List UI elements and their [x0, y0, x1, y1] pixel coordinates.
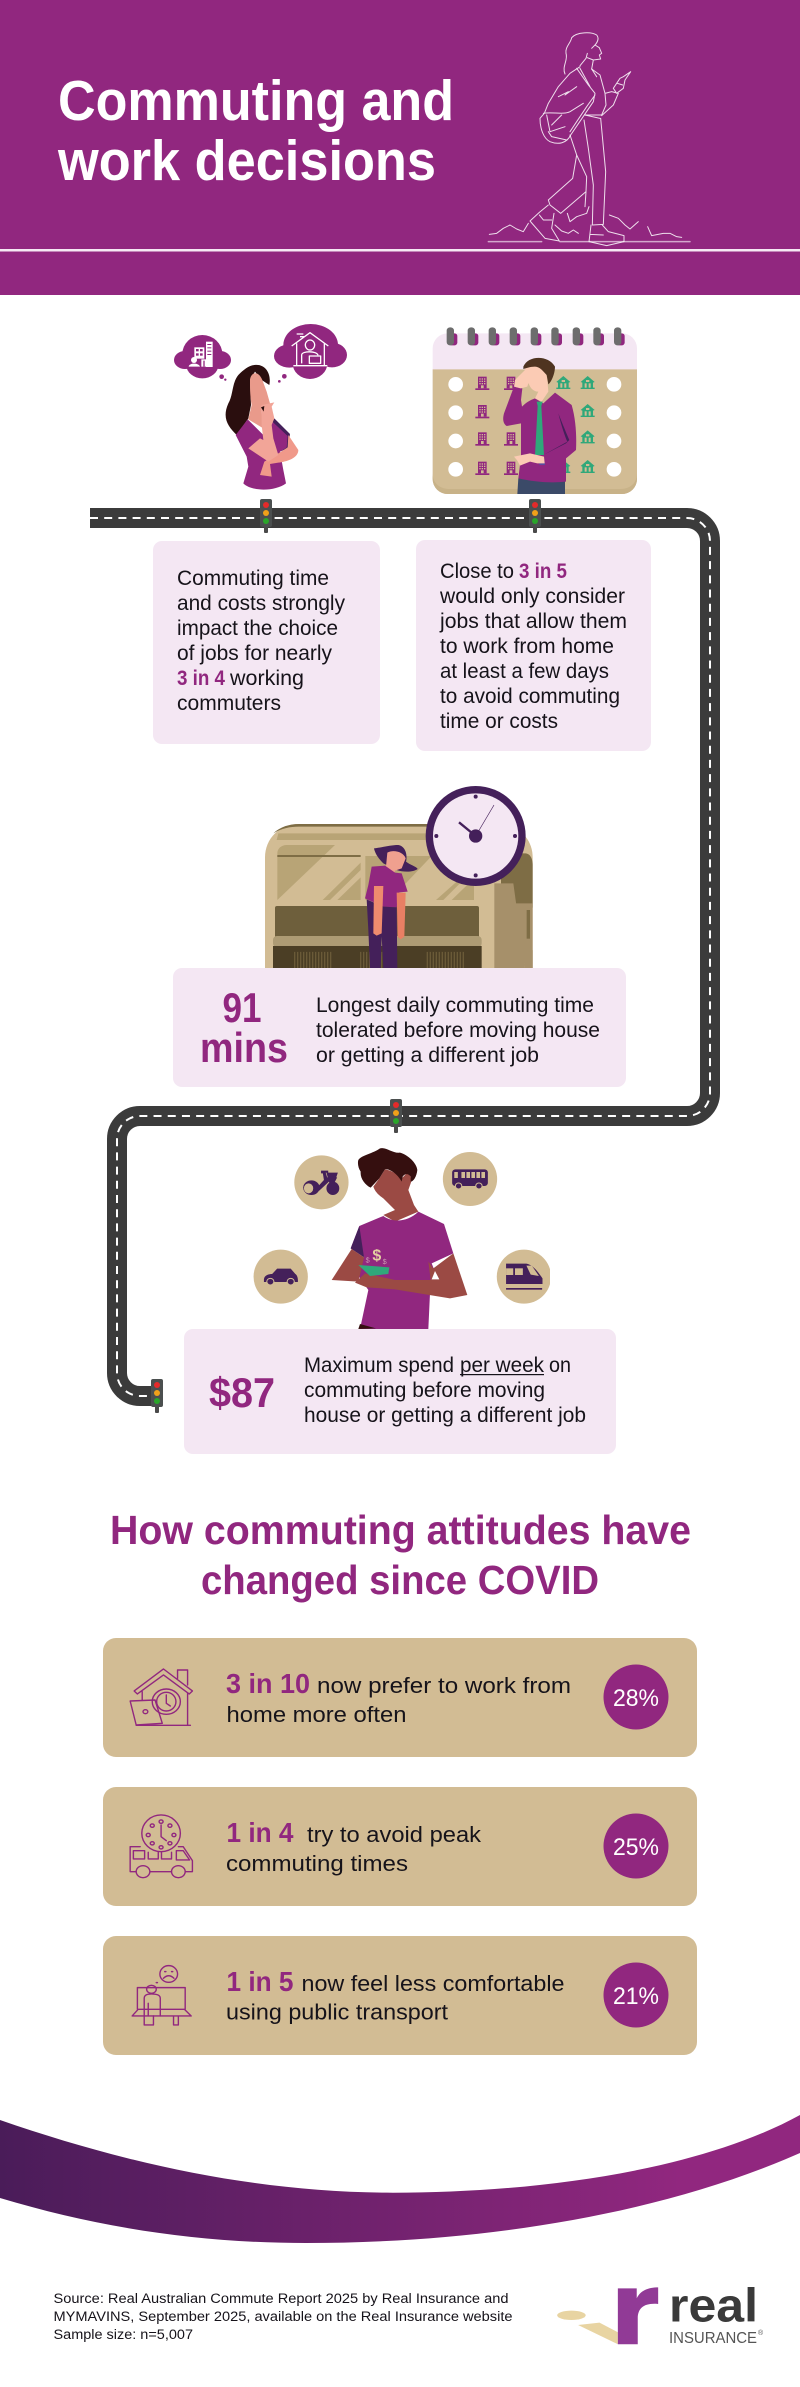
- card: 91 mins: or getting a different job: [316, 1044, 539, 1067]
- figure: woman: [226, 365, 298, 490]
- logo: Real Insurance: [557, 2278, 764, 2347]
- train interior: [265, 824, 533, 968]
- card: $87: commuting before moving: [304, 1379, 545, 1402]
- panel: 1 in 4: try to avoid peak: [307, 1822, 482, 1847]
- card: work from home: Close to: [440, 560, 514, 583]
- icon: traffic light 1: [260, 499, 272, 533]
- logo: Real Insurance: real: [669, 2278, 758, 2332]
- card: job choice: commuters: [177, 692, 281, 715]
- header banner: [0, 0, 800, 295]
- panel: 1 in 4: commuting times: [226, 1851, 408, 1876]
- card: $87: per week: [460, 1354, 544, 1377]
- icon: office thought cloud: [174, 335, 231, 381]
- icon: dollar signs: $: [372, 1248, 381, 1265]
- source note: [54, 2291, 512, 2342]
- card: $87: on: [549, 1354, 571, 1377]
- stat: 3 in 5: 3 in 5: [519, 560, 567, 583]
- source note: Sample size: n=5,007: [54, 2327, 193, 2342]
- icon: home office thought cloud: [274, 324, 347, 383]
- card: work from home: time or costs: [440, 710, 558, 733]
- card: work from home: at least a few days: [440, 660, 609, 683]
- logo: Real Insurance: ®: [758, 2329, 764, 2337]
- badge: 21%: [604, 1962, 668, 2028]
- panel: 1 in 5: [103, 1936, 697, 2055]
- illustration: man with money and transport icons: [254, 1148, 559, 1329]
- icon: person on bench: [132, 1966, 191, 2025]
- stat: 3 in 4: 3 in 4: [177, 667, 225, 690]
- card: job choice: impact the choice: [177, 617, 338, 640]
- badge: 28%: 28%: [613, 1685, 659, 1712]
- icon: dollar signs: [366, 1248, 387, 1266]
- card: work from home: to avoid commuting: [440, 685, 620, 708]
- icon: clock and van: [130, 1815, 192, 1878]
- card: 91 mins: [173, 968, 626, 1087]
- card: work from home: to work from home: [440, 635, 614, 658]
- icon: traffic light 4: [151, 1379, 163, 1413]
- title: [57, 69, 454, 193]
- card: 91 mins: tolerated before moving house: [316, 1019, 600, 1042]
- icon: traffic light 2: [529, 499, 541, 533]
- panel: 1 in 5: now feel less comfortable: [302, 1971, 564, 1996]
- calendar: [433, 327, 637, 494]
- card: 91 mins: Longest daily commuting time: [316, 994, 594, 1017]
- stat: 91 mins: [200, 984, 288, 1071]
- badge: 28%: [604, 1664, 668, 1730]
- panel: 1 in 4: [103, 1787, 697, 1906]
- panel: 1 in 5: using public transport: [226, 2000, 448, 2024]
- icon: dollar signs: $: [383, 1257, 387, 1266]
- panel: 3 in 10: home more often: [226, 1702, 406, 1727]
- card: job choice: Commuting time: [177, 567, 329, 590]
- title: Commuting and: [58, 69, 454, 133]
- section heading: [110, 1507, 691, 1603]
- illustration: thinking woman with thought clouds: [174, 324, 347, 490]
- figure: woman waiting: [365, 845, 418, 968]
- card: $87: Maximum spend: [304, 1354, 454, 1377]
- stat: $87: $87: [209, 1369, 275, 1416]
- panel: 1 in 4: 1 in 4: [226, 1817, 294, 1848]
- icon: home office clock: [130, 1669, 192, 1725]
- panel: 1 in 5: 1 in 5: [226, 1966, 294, 1997]
- illustration: calendar and stressed man: [433, 327, 637, 494]
- badge: 21%: 21%: [613, 1983, 659, 2010]
- stat: 91 mins: mins: [200, 1024, 288, 1071]
- badge: 25%: [604, 1814, 668, 1878]
- clock: [426, 786, 526, 886]
- title: work decisions: [57, 129, 436, 193]
- illustration: train carriage with woman and clock: [265, 786, 533, 968]
- card: job choice: working: [229, 667, 304, 690]
- source note: MYMAVINS, September 2025, available on the Real Insurance website: [54, 2309, 512, 2324]
- icon: dollar signs: $: [366, 1256, 370, 1265]
- card: job choice: [153, 541, 380, 744]
- panel: 3 in 10: [103, 1638, 697, 1757]
- stat: 91 mins: 91: [222, 984, 262, 1031]
- decorative footer swoosh: [0, 2115, 800, 2243]
- card: work from home: [416, 540, 651, 751]
- card: $87: [184, 1329, 616, 1454]
- icon: car: [254, 1250, 308, 1304]
- card: $87: house or getting a different job: [304, 1404, 586, 1427]
- card: job choice: of jobs for nearly: [177, 642, 332, 665]
- card: job choice: and costs strongly: [177, 592, 345, 615]
- panel: 3 in 10: 3 in 10: [226, 1668, 310, 1699]
- figure: man counting money: [332, 1148, 467, 1329]
- icon: r mark: [557, 2287, 658, 2344]
- badge: 25%: 25%: [613, 1834, 659, 1861]
- road with traffic lights: [90, 499, 710, 1413]
- icon: bus: [443, 1152, 497, 1206]
- section heading: How commuting attitudes have: [110, 1507, 691, 1553]
- section heading: changed since COVID: [201, 1557, 599, 1603]
- icon: walking woman line drawing: [488, 33, 690, 246]
- icon: bicycle: [294, 1155, 349, 1209]
- icon: train: [497, 1247, 559, 1307]
- source note: Source: Real Australian Commute Report 2025 by Real Insurance and: [54, 2291, 508, 2306]
- card: work from home: would only consider: [439, 585, 625, 608]
- logo: Real Insurance: INSURANCE: [669, 2330, 757, 2347]
- figure: man: [503, 358, 576, 494]
- card: work from home: jobs that allow them: [439, 610, 627, 633]
- icon: traffic light 3: [390, 1099, 402, 1133]
- panel: 3 in 10: now prefer to work from: [317, 1673, 571, 1698]
